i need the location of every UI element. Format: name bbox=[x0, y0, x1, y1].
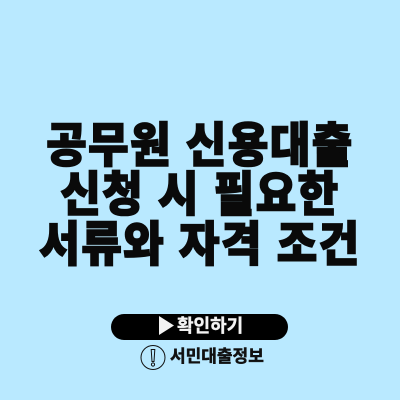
title bbox=[39, 120, 361, 272]
button: confirm bbox=[111, 314, 288, 340]
icon: exclamation circle bbox=[140, 345, 166, 370]
title line 2: 신청 시 필요한 bbox=[60, 169, 340, 222]
brand name: 서민대출정보 bbox=[170, 347, 264, 366]
title line 1: 공무원 신용대출 bbox=[46, 120, 354, 173]
button label: 확인하기 bbox=[177, 316, 243, 336]
title line 3: 서류와 자격 조건 bbox=[39, 219, 361, 272]
icon: play triangle bbox=[159, 316, 174, 335]
